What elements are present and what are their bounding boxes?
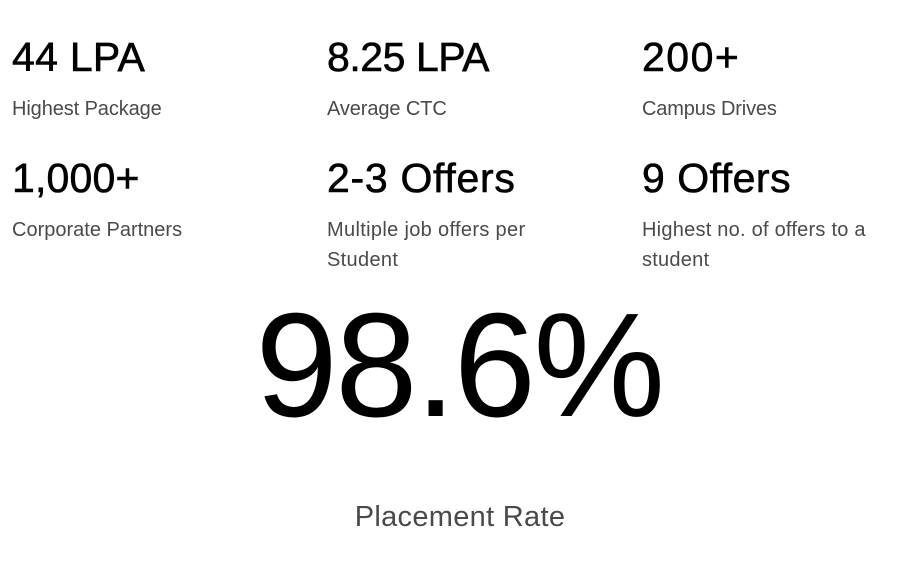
stat: campus drives: 200+ [642, 34, 740, 80]
stat: average CTC [327, 34, 490, 120]
stat: highest package: 44 LPA [12, 34, 145, 80]
stat: corporate partners: 1,000+ [12, 155, 140, 201]
stat: average CTC: 8.25 LPA [327, 34, 489, 80]
stat: highest offers [642, 155, 866, 271]
stat: multiple offers [327, 155, 525, 271]
label: placement rate: Placement Rate [355, 501, 565, 533]
stat: campus drives [642, 34, 777, 120]
stat: corporate partners [12, 155, 182, 241]
stat: highest package [12, 34, 162, 120]
stat: multiple offers: 2-3 Offers [327, 155, 516, 201]
stat: highest offers: 9 Offers [642, 155, 791, 201]
stat: highest offers: student [642, 249, 709, 271]
stat: highest package: Highest Package [12, 98, 162, 120]
stat: multiple offers: Multiple job offers per [327, 219, 525, 241]
stat: average CTC: Average CTC [327, 98, 447, 120]
big number: placement rate value: 98.6% [255, 283, 663, 448]
stat: highest offers: Highest no. of offers to a [642, 219, 866, 241]
stat: multiple offers: Student [327, 249, 398, 271]
stat: campus drives: Campus Drives [642, 98, 777, 120]
stat: corporate partners: Corporate Partners [12, 219, 182, 241]
